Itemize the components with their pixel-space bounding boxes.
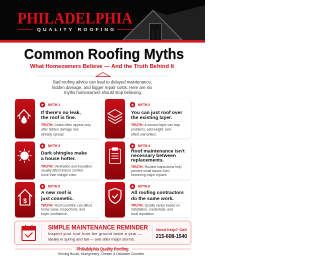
truth text: TRUTH: A second layer can trap	[131, 123, 180, 127]
myth heading	[41, 110, 81, 121]
myth heading: replacements.	[131, 158, 165, 164]
truth text	[131, 203, 180, 216]
truth text: after hidden damage has	[41, 128, 79, 132]
truth text: TRUTH: Quality varies based on	[131, 203, 180, 207]
truth text: problems, add weight, and	[131, 128, 171, 132]
myth heading: the roof is fine.	[41, 115, 77, 121]
card: myth 1	[15, 99, 101, 138]
myth badge: MYTH 5	[48, 185, 60, 189]
icon: shield with check	[109, 188, 121, 204]
header banner	[0, 0, 205, 43]
truth text	[131, 165, 182, 177]
myth badge: MYTH 3	[48, 144, 60, 148]
truth text: TRUTH: Ventilation and insulation	[41, 164, 92, 168]
truth text: usually affect indoor comfort	[41, 169, 83, 173]
reminder text: ideally in spring and fall — and after major storms.	[48, 237, 135, 242]
call to action: Need help? Call	[156, 227, 187, 232]
intro text: myths homeowners should stop believing.	[64, 90, 142, 95]
myth heading: Roof maintenance isn't	[131, 149, 185, 155]
call to action	[156, 227, 187, 240]
truth text: local reputation.	[131, 212, 155, 216]
truth text	[41, 164, 92, 177]
truth text: more than shingle color.	[41, 173, 77, 177]
myth badge: MYTH 4	[138, 144, 150, 148]
truth text: home value, inspections, and	[41, 208, 85, 212]
truth text: installation, credentials, and	[131, 208, 173, 212]
subtitle: What Homeowners Believe — And the Truth Behind It	[30, 64, 174, 70]
card: myth 5	[15, 182, 101, 218]
intro text	[52, 79, 153, 95]
icon: stacked layers	[108, 110, 122, 124]
icon: calendar check	[22, 225, 36, 240]
truth text: already spread.	[41, 132, 64, 136]
house roof illustration	[123, 5, 205, 40]
truth text	[41, 123, 91, 136]
myth heading: A new roof is	[41, 190, 72, 196]
myth heading: the existing layer.	[131, 115, 173, 121]
myth heading: do the same work.	[131, 196, 174, 202]
myth heading: necessary between	[131, 153, 176, 159]
reminder text: Inspect your roof from the ground twice a year —	[48, 231, 142, 236]
reminder heading: SIMPLE MAINTENANCE REMINDER	[48, 225, 149, 231]
truth text: affect warranties.	[131, 132, 157, 136]
truth text: prevent small issues from	[131, 169, 170, 173]
icon: roof with water drop	[18, 110, 30, 124]
card: myth 6	[105, 182, 191, 218]
icon: house with dollar: $	[23, 198, 27, 205]
call to action: 215-608-1540	[156, 234, 187, 240]
card: myth 4	[105, 142, 191, 180]
truth text: buyer confidence.	[41, 212, 68, 216]
truth text: TRUTH: Leaks often appear only	[41, 123, 91, 127]
divider with roof mark	[37, 72, 169, 76]
footer: Philadelphia Quality Roofing	[76, 246, 129, 251]
myth badge: MYTH 1	[48, 103, 60, 107]
reminder text	[48, 231, 142, 242]
myth heading	[41, 150, 87, 162]
myth heading: If there's no leak,	[41, 110, 81, 116]
truth text: becoming major repairs.	[131, 173, 167, 177]
icon: clipboard	[110, 148, 120, 164]
myth heading	[40, 190, 74, 202]
myth badge: MYTH 6	[138, 185, 150, 189]
reminder panel	[14, 221, 191, 244]
myth heading: a house hotter.	[41, 156, 76, 162]
logo wordmark: PHILADELPHIA	[18, 10, 133, 27]
card: myth 2	[105, 99, 191, 138]
intro text: hidden damage, and bigger repair costs. Here are six	[52, 85, 153, 90]
logo tagline: QUALITY ROOFING	[37, 27, 114, 33]
myth badge: MYTH 2	[138, 103, 150, 107]
truth text	[131, 123, 180, 136]
logo tagline	[18, 27, 133, 33]
truth text	[41, 203, 92, 216]
myth heading: Dark shingles make	[41, 150, 87, 156]
myth heading	[131, 149, 185, 164]
truth text: TRUTH: Roof condition can affect	[41, 203, 92, 207]
title: Common Roofing Myths	[24, 47, 184, 63]
truth text: TRUTH: Routine inspections help	[131, 165, 182, 169]
intro text: Bad roofing advice can lead to delayed maintenance,	[53, 79, 152, 84]
footer	[15, 246, 191, 256]
myth heading	[131, 190, 184, 202]
myth heading: All roofing contractors	[131, 190, 184, 196]
myth heading	[131, 110, 182, 121]
myth heading: You can just roof over	[131, 110, 182, 116]
myth heading: just cosmetic.	[40, 196, 74, 202]
card: myth 3	[15, 142, 101, 180]
icon: sun	[18, 149, 32, 163]
